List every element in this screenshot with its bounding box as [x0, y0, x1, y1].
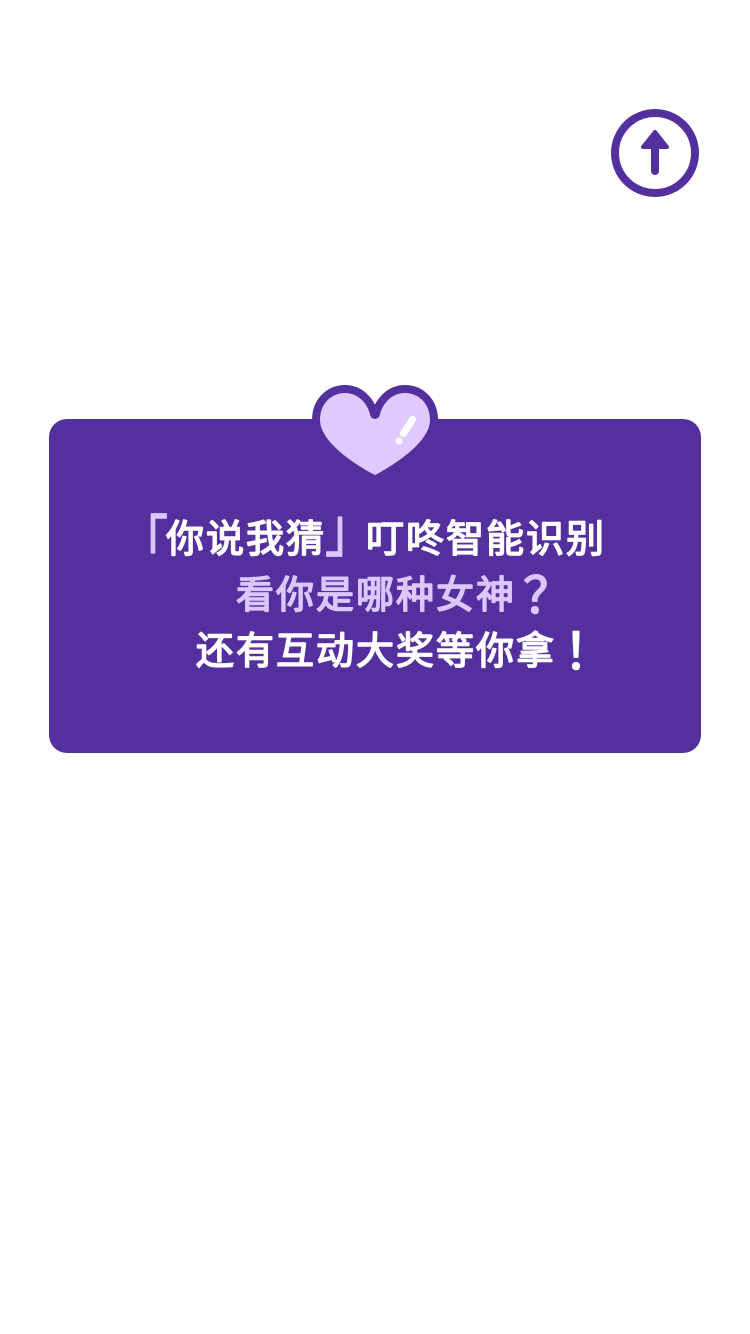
heading line 1: 叮咚智能识别: [366, 508, 606, 563]
heading line 3: ！: [564, 612, 614, 684]
heading line 1: 」: [325, 481, 373, 569]
icon: heart: [320, 393, 430, 475]
heading line 1: [120, 481, 606, 583]
heading line 2: 看你是哪种女神: [236, 564, 516, 619]
heading line 1: 「: [120, 495, 168, 583]
icon: up arrow in circle: [615, 113, 695, 193]
heading line 2: [236, 556, 573, 628]
heading line 1: 你说我猜: [166, 508, 326, 563]
panel: purple message card: [49, 419, 701, 753]
heading line 2: ？: [523, 556, 573, 628]
heading line 3: 还有互动大奖等你拿: [196, 620, 556, 675]
heading line 3: [196, 612, 614, 684]
